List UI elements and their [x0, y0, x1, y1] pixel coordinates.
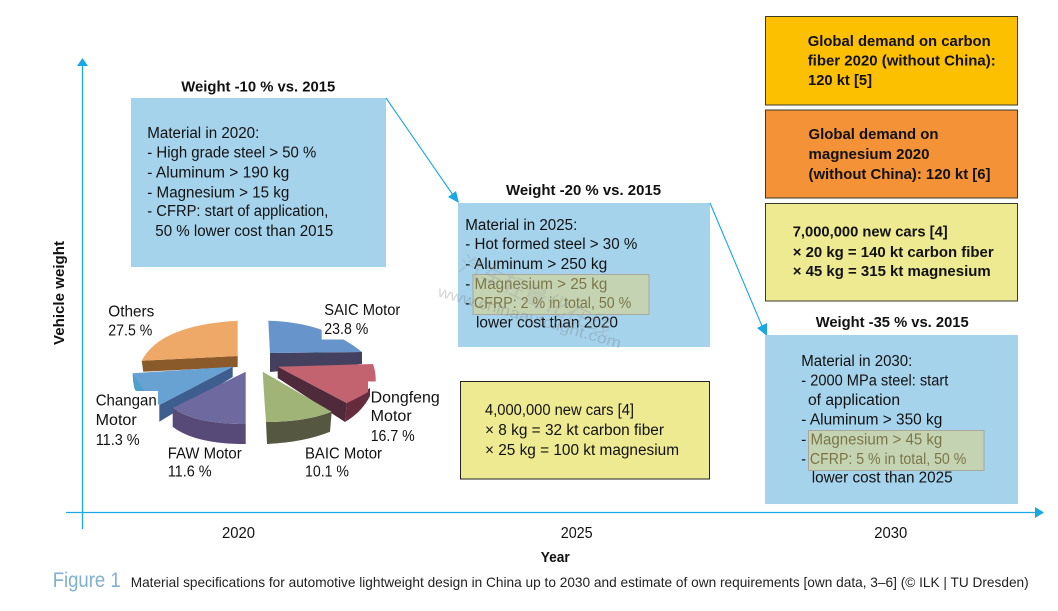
- slice: Changan Motor: [133, 367, 233, 422]
- arrow: 2020 to 2025: [386, 98, 459, 203]
- panel: global magnesium demand: Global demand on: [808, 126, 938, 143]
- panel: materials 2025: - Magnesium > 25 kg: [465, 276, 607, 293]
- y axis arrow: [77, 58, 88, 529]
- pie chart: market share: [133, 321, 376, 444]
- label: BAIC Motor: BAIC Motor: [305, 445, 382, 462]
- heading: weight 2025: Weight -20 % vs. 2015: [506, 182, 661, 199]
- x axis tick: 2025: 2025: [561, 525, 593, 542]
- label: FAW Motor: FAW Motor: [168, 445, 242, 462]
- panel: materials 2025: lower cost than 2020: [476, 315, 618, 332]
- label: BAIC Motor: 10.1 %: [305, 464, 349, 481]
- slice: SAIC Motor: [268, 321, 362, 372]
- panel: materials 2030: Material in 2030:: [801, 353, 912, 370]
- panel: materials 2020: - Aluminum > 190 kg: [147, 164, 289, 181]
- panel: global carbon fiber demand: [766, 16, 1018, 105]
- x axis arrow: [66, 507, 1044, 518]
- x axis tick: 2030: 2030: [874, 525, 908, 542]
- x axis tick: 2020: 2020: [222, 525, 255, 542]
- x axis label: Year: [541, 549, 570, 566]
- caption: Material specifications for automotive lightweight design in China up to 2030 and estimate of own requirements [own data, 3–6] (© ILK | TU Dresden): [131, 574, 1029, 590]
- panel: 2025 demand estimate: [460, 382, 710, 479]
- panel: materials 2025: - Aluminum > 250 kg: [465, 256, 607, 273]
- label: BAIC Motor: [305, 445, 382, 481]
- panel: materials 2030: - 2000 MPa steel: start: [801, 372, 949, 389]
- panel: 2025 demand estimate: 4,000,000 new cars [4]: [485, 402, 634, 419]
- label: Others: 27.5 %: [108, 323, 152, 340]
- panel: global carbon fiber demand: Global demand on carbon: [808, 33, 991, 50]
- slice: FAW Motor: [173, 372, 246, 444]
- panel: materials 2020: [131, 98, 386, 267]
- panel: 2030 demand estimate: × 20 kg = 140 kt carbon fiber: [793, 244, 994, 261]
- label: SAIC Motor: 23.8 %: [324, 321, 368, 338]
- panel: materials 2030: [765, 335, 1018, 504]
- panel: global magnesium demand: (without China): 120 kt [6]: [808, 166, 990, 183]
- panel: 2030 demand estimate: × 45 kg = 315 kt magnesium: [793, 263, 991, 280]
- watermark: 汽车轻量化在线: [455, 251, 616, 342]
- label: FAW Motor: 11.6 %: [168, 464, 212, 481]
- label: Dongfeng Motor: Motor: [371, 408, 412, 425]
- panel: global carbon fiber demand: fiber 2020 (without China):: [808, 52, 996, 69]
- panel: global carbon fiber demand: 120 kt [5]: [808, 72, 872, 89]
- label: Changan Motor: Changan: [96, 393, 157, 410]
- panel: materials 2020: Material in 2020:: [147, 125, 259, 142]
- panel: materials 2020: - CFRP: start of application,: [147, 203, 328, 220]
- panel: materials 2030: lower cost than 2025: [812, 470, 953, 487]
- panel: materials 2030: of application: [808, 392, 900, 409]
- panel: materials 2030: - Aluminum > 350 kg: [801, 411, 942, 428]
- label: Others: [108, 304, 155, 340]
- label: SAIC Motor: [322, 301, 400, 340]
- heading: weight 2030: Weight -35 % vs. 2015: [816, 314, 969, 331]
- label: SAIC Motor: SAIC Motor: [324, 302, 400, 319]
- label: Dongfeng Motor: Dongfeng: [371, 390, 440, 407]
- panel: global magnesium demand: [766, 110, 1018, 198]
- slice: Dongfeng Motor: [278, 364, 376, 422]
- panel: 2030 demand estimate: 7,000,000 new cars [4]: [793, 224, 948, 241]
- figure number: Figure 1: [53, 569, 121, 592]
- panel: 2025 demand estimate: × 8 kg = 32 kt carbon fiber: [485, 422, 664, 439]
- panel: materials 2025: [458, 203, 710, 347]
- label: Changan Motor: 11.3 %: [96, 432, 140, 449]
- label: Dongfeng Motor: [371, 390, 440, 445]
- panel: materials 2020: - Magnesium > 15 kg: [147, 184, 289, 201]
- label: Dongfeng Motor: 16.7 %: [371, 428, 415, 445]
- arrow: 2025 to 2030: [710, 203, 767, 336]
- slice: Others: [142, 321, 238, 372]
- panel: 2025 demand estimate: × 25 kg = 100 kt magnesium: [485, 442, 679, 459]
- panel: materials 2030: - Magnesium > 45 kg: [801, 431, 942, 448]
- panel: materials 2025: - Hot formed steel > 30 %: [465, 236, 638, 253]
- panel: materials 2025: Material in 2025:: [465, 217, 577, 234]
- label: Changan Motor: [94, 391, 158, 449]
- heading: weight 2020: Weight -10 % vs. 2015: [181, 79, 335, 96]
- label: Changan Motor: Motor: [96, 412, 137, 429]
- panel: materials 2020: - High grade steel > 50 %: [147, 144, 317, 161]
- label: FAW Motor: [168, 445, 242, 481]
- watermark: www.chinaautolight.com: [435, 283, 623, 352]
- panel: global magnesium demand: magnesium 2020: [808, 146, 930, 163]
- slice: BAIC Motor: [263, 372, 332, 444]
- panel: materials 2025: - CFRP: 2 % in total, 50 %: [465, 295, 631, 312]
- panel: materials 2020: 50 % lower cost than 2015: [155, 223, 333, 240]
- y axis label: Vehicle weight: [51, 241, 68, 345]
- panel: 2030 demand estimate: [766, 204, 1018, 301]
- panel: materials 2030: - CFRP: 5 % in total, 50 %: [801, 451, 966, 468]
- label: Others: Others: [108, 304, 155, 321]
